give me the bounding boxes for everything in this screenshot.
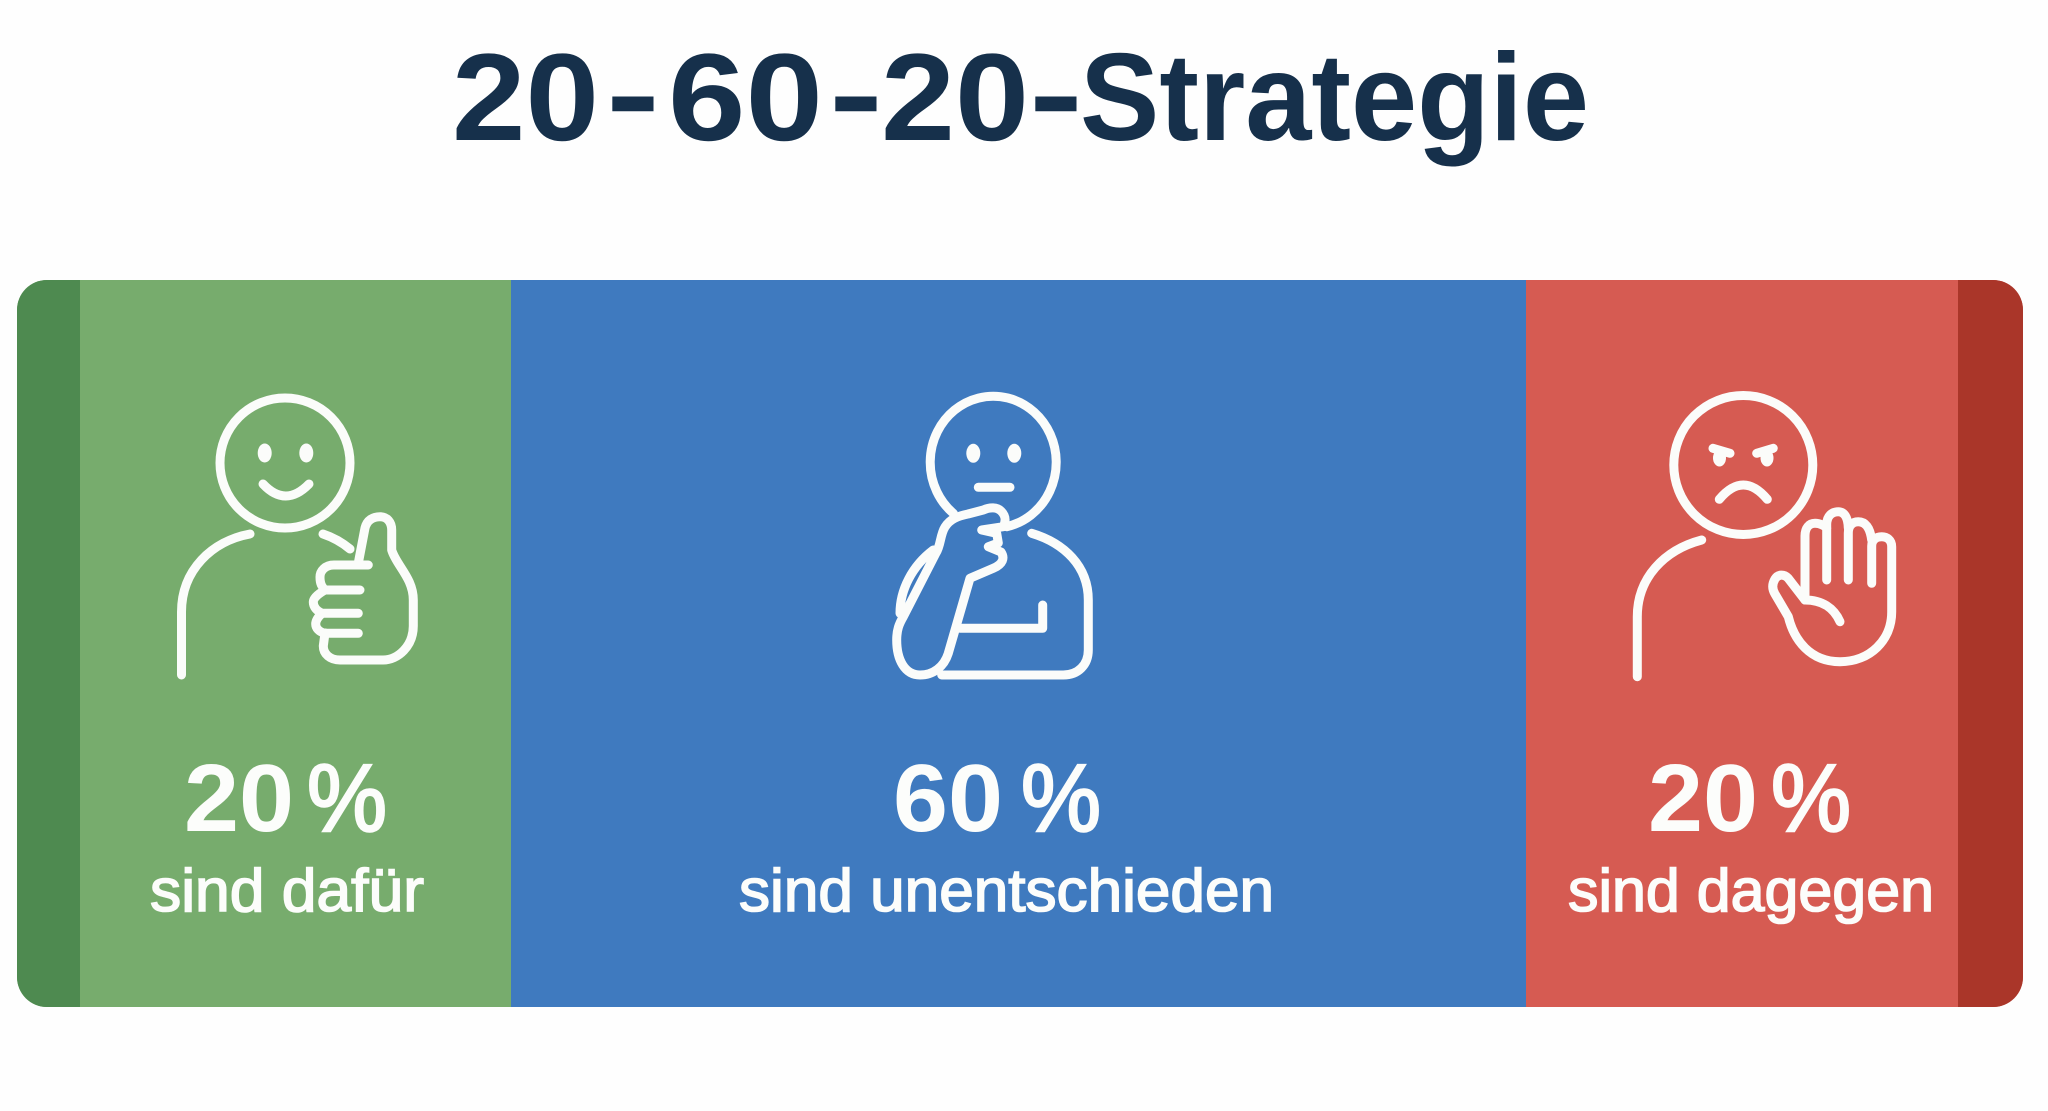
text: blue label: sind unentschieden [739, 857, 1274, 924]
text: green percentage: 20 [184, 745, 294, 852]
title: - [829, 25, 883, 163]
panel: segmented bar [17, 280, 2023, 1007]
text: red percentage: 20 [1648, 745, 1758, 852]
panel: blue segment [511, 280, 1526, 1007]
icon: undecided person thinking [897, 396, 1088, 675]
title: - [1029, 25, 1083, 163]
title: - [606, 25, 660, 163]
red dark edge [1958, 280, 2023, 1007]
panel: green segment [17, 280, 511, 1007]
title: 20 [881, 29, 1029, 167]
icon: angry person with stop hand [1637, 396, 1892, 677]
text: green label: sind dafür [150, 857, 424, 924]
panel: red segment [1526, 280, 2023, 1007]
text: blue percentage: 60 [893, 745, 1003, 852]
text: red label: sind dagegen [1568, 857, 1934, 924]
text: blue percentage: % [1021, 745, 1101, 852]
title: 20 [452, 29, 599, 167]
icon: happy person with thumbs up [182, 398, 413, 675]
title: Strategie [1080, 29, 1589, 167]
text: green percentage: % [307, 745, 387, 852]
text: red percentage: % [1771, 745, 1851, 852]
title: 60 [668, 29, 823, 167]
green dark edge [17, 280, 80, 1007]
